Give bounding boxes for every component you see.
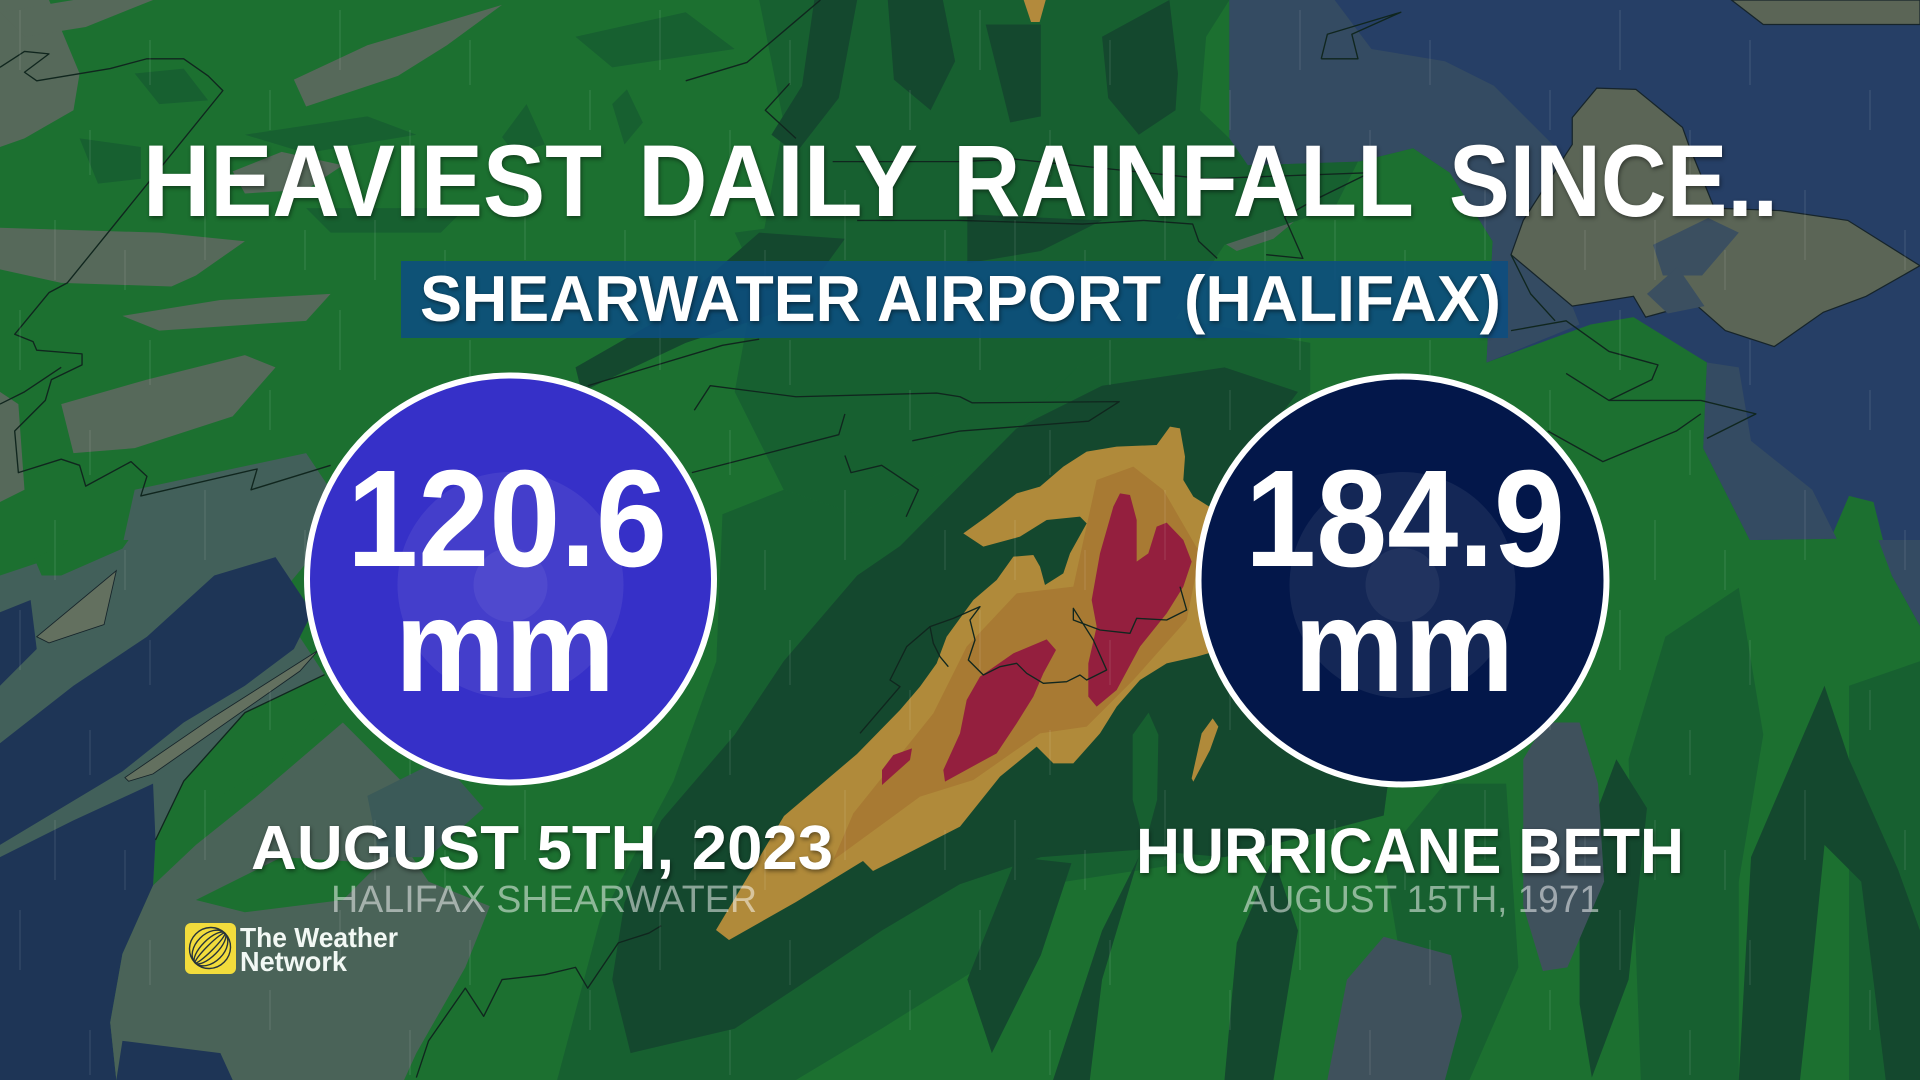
title: HEAVIEST bbox=[143, 124, 602, 238]
stat circle: 120.6 mm bbox=[307, 376, 714, 782]
land, Cape Breton gap bbox=[1217, 173, 1315, 251]
title: DAILY bbox=[638, 124, 918, 238]
title: SINCE.. bbox=[1449, 124, 1778, 238]
heavy rain system over Nova Scotia bbox=[716, 427, 1220, 940]
stat circle: 184.9 mm: 184.9 bbox=[1245, 442, 1565, 596]
caption: Hurricane Beth: HURRICANE BETH bbox=[1136, 815, 1684, 887]
logo: The Weather Network: Network bbox=[240, 946, 347, 977]
Newfoundland bays bbox=[1647, 218, 1739, 313]
orange top spot bbox=[1024, 0, 1046, 22]
subtitle banner: AIRPORT bbox=[877, 262, 1161, 335]
sub-caption: August 15th, 1971: AUGUST 15TH, 1971 bbox=[1243, 879, 1600, 921]
navy ocean, upper right bbox=[1229, 0, 1920, 626]
dark green band, center diagonal bbox=[612, 367, 1396, 1053]
title bbox=[143, 124, 1778, 238]
land, Newfoundland bbox=[1511, 0, 1920, 347]
green spur on left edge bbox=[34, 540, 129, 576]
dark green streaks, upper center bbox=[576, 0, 1178, 392]
right side dark streaks bbox=[1384, 588, 1920, 1080]
caption: August 5th, 2023: AUGUST 5TH, 2023 bbox=[251, 814, 833, 883]
gray band along the Maine coast bbox=[110, 722, 490, 1080]
gray low-precip patches, upper left bbox=[0, 0, 502, 502]
title: RAINFALL bbox=[953, 124, 1414, 238]
darker orange core bbox=[833, 467, 1200, 860]
left navy and slate ocean bbox=[0, 453, 331, 1080]
stat circle: 120.6 mm: 120.6 bbox=[347, 442, 667, 596]
dark streak, lower center bbox=[967, 857, 1071, 1053]
red heavy-rain core bbox=[882, 493, 1192, 785]
small orange island bbox=[1192, 718, 1218, 782]
logo: The Weather Network: The Weather bbox=[240, 922, 398, 953]
stat circle: 120.6 mm: mm bbox=[395, 572, 615, 719]
slate gaps in rain shield, lower right bbox=[1327, 722, 1604, 1080]
gray ridge and island bbox=[37, 571, 318, 781]
subtitle banner: SHEARWATER bbox=[420, 262, 861, 335]
mid-green band, upper center bbox=[735, 0, 1358, 514]
orange rainfall area bbox=[716, 427, 1220, 940]
mid-green band, center diagonal bbox=[557, 318, 1396, 1080]
green streak below the rain core bbox=[1133, 713, 1158, 845]
stat circle: 184.9 mm: mm bbox=[1294, 572, 1514, 719]
sub-caption: Halifax Shearwater: HALIFAX SHEARWATER bbox=[331, 879, 757, 921]
subtitle banner bbox=[401, 261, 1508, 338]
logo: The Weather Network bbox=[181, 919, 398, 977]
stat circle: 184.9 mm bbox=[1198, 376, 1606, 784]
subtitle banner: (HALIFAX) bbox=[1184, 262, 1501, 335]
Nova Scotia coast bbox=[860, 587, 1187, 733]
